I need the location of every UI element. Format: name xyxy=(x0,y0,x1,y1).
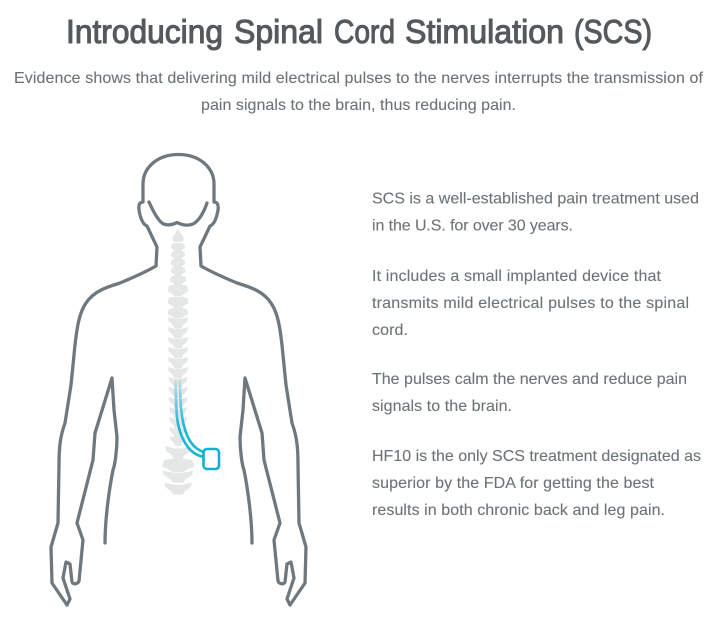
paragraph: HF10 designation: superior by the FDA for getting the best xyxy=(372,475,655,492)
title: Spinal xyxy=(234,13,323,50)
paragraph: well-established treatment: SCS is a well-established pain treatment used xyxy=(372,190,699,208)
paragraph: HF10 designation xyxy=(372,448,701,519)
paragraph: pulses calm nerves xyxy=(372,371,687,415)
paragraph: pulses calm nerves: The pulses calm the nerves and reduce pain xyxy=(372,371,687,388)
paragraph: implanted device: cord. xyxy=(372,322,408,339)
paragraph: HF10 designation: results in both chronic back and leg pain. xyxy=(372,502,665,519)
paragraph: pulses calm nerves: signals to the brain. xyxy=(372,398,512,415)
illustration: human body with SCS implant xyxy=(51,154,306,605)
paragraph: implanted device: transmits mild electrical pulses to the spinal xyxy=(372,295,689,312)
body outline: head and left side xyxy=(51,154,306,605)
paragraph: HF10 designation: HF10 is the only SCS treatment designated as xyxy=(372,448,701,465)
title: (SCS) xyxy=(574,13,652,50)
paragraph: well-established treatment xyxy=(372,190,699,234)
paragraph: implanted device xyxy=(372,268,689,339)
paragraph: well-established treatment: in the U.S. for over 30 years. xyxy=(372,218,573,234)
spine xyxy=(162,229,194,495)
subtitle text block xyxy=(14,70,704,114)
subtitle text block: Evidence shows that delivering mild electrical pulses to the nerves interrupts the transmission of xyxy=(14,70,704,87)
paragraph: implanted device: It includes a small implanted device that xyxy=(372,268,662,285)
title: Stimulation xyxy=(405,13,564,50)
implanted pulse generator xyxy=(204,449,219,469)
spinal lead wires xyxy=(176,380,204,457)
title: Cord xyxy=(334,13,395,50)
subtitle text block: pain signals to the brain, thus reducing pain. xyxy=(201,97,516,114)
title xyxy=(66,13,652,50)
title: Introducing xyxy=(66,13,223,50)
